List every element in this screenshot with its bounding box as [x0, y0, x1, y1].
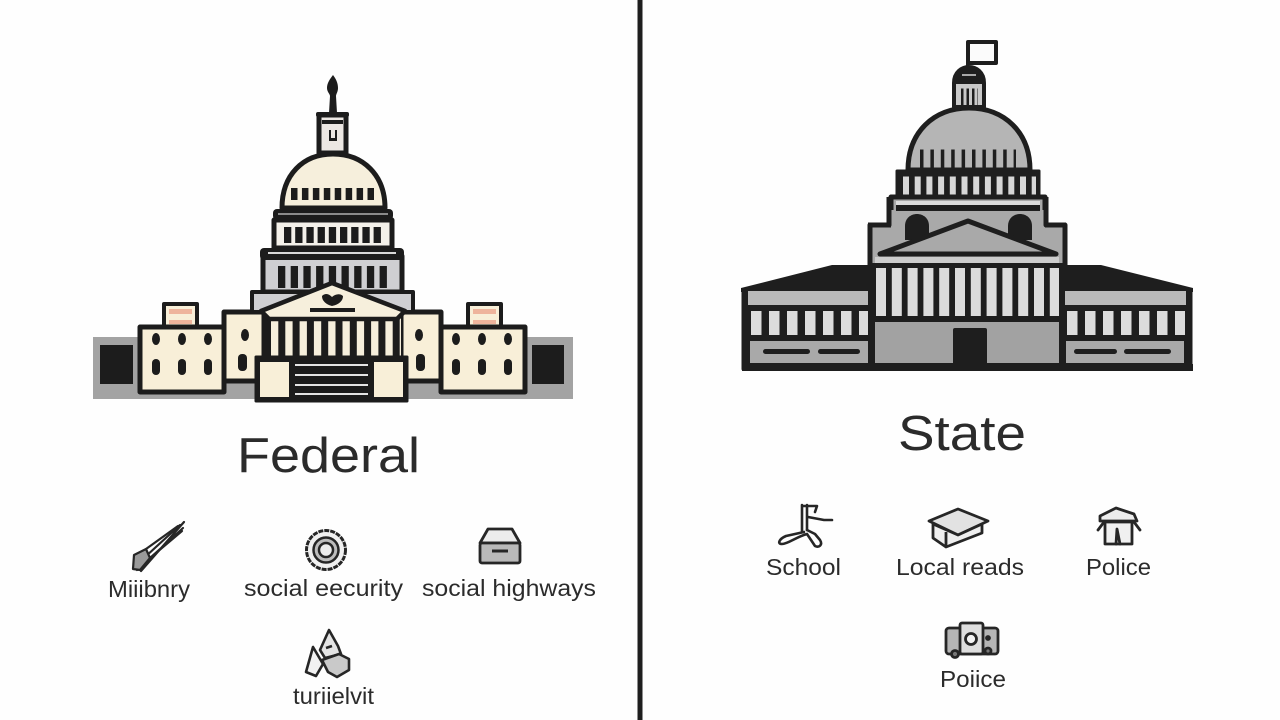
icon: state capitol building [741, 42, 1193, 371]
icon: police station [1098, 508, 1140, 544]
icon: graduation cap [929, 509, 988, 547]
heading: State: State [898, 407, 1026, 461]
label: Police: Police [1086, 554, 1151, 580]
label: social eecurity: social eecurity [244, 575, 404, 601]
icon: drawer box [480, 529, 520, 563]
icon: social security seal [306, 530, 346, 570]
panel: federal [93, 75, 596, 709]
label: social highways: social highways [422, 575, 596, 601]
panel: state [741, 42, 1193, 692]
label: Local reads: Local reads [896, 554, 1024, 580]
label: turiielvit: turiielvit [293, 683, 375, 709]
label: military: Miiibnry [108, 576, 191, 602]
icon: military [133, 522, 184, 571]
icon: radio camera [946, 623, 998, 658]
icon: school [779, 505, 832, 547]
icon: mountain shield [306, 630, 349, 677]
heading: Federal: Federal [237, 429, 420, 483]
label: School: School [766, 554, 841, 580]
icon: federal capitol building [93, 75, 573, 401]
label: Poiice: Poiice [940, 666, 1006, 692]
